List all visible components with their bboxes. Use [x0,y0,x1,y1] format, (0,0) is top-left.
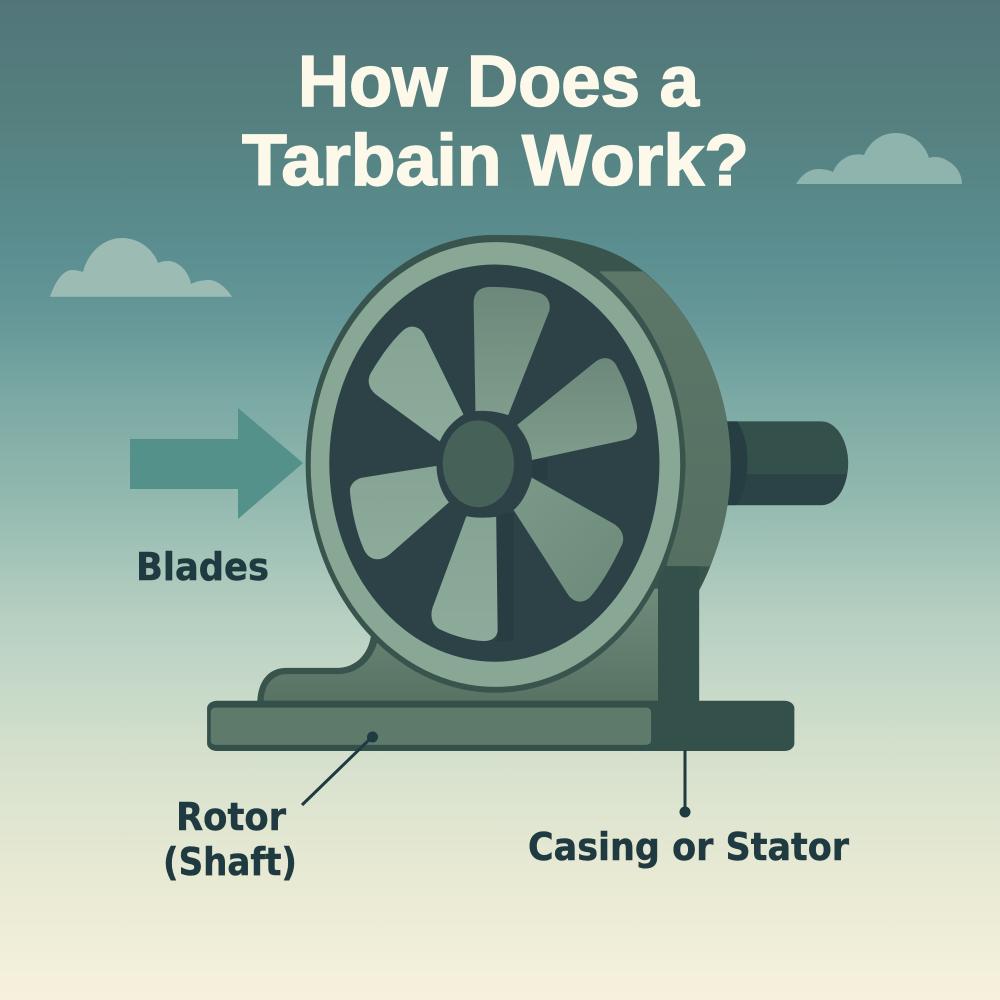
leader line: casing [680,750,690,818]
wheel inner disc [329,264,659,662]
hub [443,420,514,507]
leader line: rotor [302,732,378,805]
icon: cloud left [50,238,232,297]
title [242,42,749,201]
label: blades: Blades [136,545,269,589]
support column [658,566,699,751]
blade upper left [369,327,463,441]
title: Tarbain Work? [242,121,749,201]
label: rotor (shaft) [163,795,297,884]
wheel light ring [311,242,680,687]
label: rotor (shaft): (Shaft) [163,840,297,884]
hub collar [437,411,532,518]
shadow under hub [497,459,547,642]
casing or stator: drum and support [505,235,731,702]
label: casing or stator: Casing or Stator [528,825,849,869]
blade top [474,287,550,415]
arrow: flow into turbine [130,408,303,519]
blade lower right [514,478,623,602]
base plate [207,701,794,751]
blade upper right [517,358,637,460]
blades [350,287,637,641]
pedestal [257,589,658,704]
shaft [723,421,848,505]
icon: cloud right [796,133,962,184]
wheel outer rim [306,235,685,693]
title: How Does a [298,42,700,122]
turbine illustration [207,235,848,751]
blade bottom [431,516,498,641]
label: rotor (shaft): Rotor [176,795,286,839]
blade lower left [350,466,449,559]
